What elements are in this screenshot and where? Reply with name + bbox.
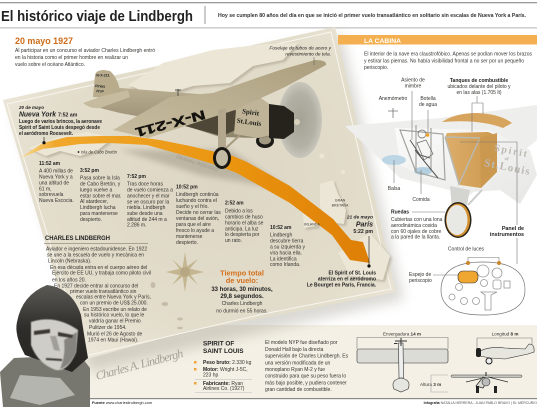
timeline: 10:52 am: como Irlanda. bbox=[270, 262, 300, 268]
label: raft: Balsa bbox=[388, 186, 400, 192]
fin markings: NYP bbox=[96, 89, 105, 94]
far wheel bbox=[256, 134, 274, 148]
ghost fuselage lettering bbox=[483, 141, 534, 178]
timeline: 10:52 pm: Decide no cerrar las bbox=[176, 210, 221, 216]
label: periscope mirror: Espejo de bbox=[409, 272, 431, 278]
arrival text bbox=[307, 270, 377, 288]
map label: Great Britain: GRAN bbox=[335, 198, 346, 202]
propeller disc bbox=[278, 82, 322, 158]
text: model description bbox=[265, 340, 349, 393]
timeline: 10:52 pm: sueño y el frío. bbox=[176, 204, 209, 210]
ghost fuselage lettering: St.Louis bbox=[483, 157, 531, 178]
timeline: 2:52 am: cambios de huso bbox=[225, 214, 263, 220]
biography: Charles Lindbergh: Aviador e ingeniero estadounidense. En 1922 bbox=[46, 247, 147, 253]
timeline: 2:52 am: Debido a los bbox=[225, 209, 253, 215]
timeline: 3:52 pm: luego vuelve a bbox=[80, 187, 112, 193]
panel: spirit of saint louis specs: SPIRIT OF bbox=[203, 340, 234, 348]
label: wheels: con 60 ojales de cobre bbox=[391, 229, 442, 235]
antenna bbox=[175, 89, 181, 96]
intro text: en la historia como el primer hombre en realizar un bbox=[15, 55, 128, 61]
timeline: 10:52 pm: para que el aire bbox=[176, 222, 211, 228]
panel: map paper bbox=[3, 27, 404, 372]
panel: spirit of saint louis specs: SAINT LOUIS bbox=[203, 348, 244, 355]
label: fuselage: revestimiento de tela. bbox=[285, 52, 331, 58]
biography: Charles Lindbergh: valdría ganar el Premio bbox=[89, 319, 141, 325]
diagram: front view: Altura 3 m bbox=[420, 382, 441, 387]
label: periscope mirror: periscopio bbox=[409, 278, 432, 284]
biography: Charles Lindbergh: primer vuelo transatlántico sin bbox=[70, 289, 137, 295]
timeline: 10:52 am: vira hacia ella. bbox=[270, 250, 302, 256]
gear strut bbox=[450, 186, 470, 210]
timeline: 10:52 pm: 10:52 pm bbox=[176, 184, 198, 190]
arrival text: aterriza en el aeródromo bbox=[318, 276, 376, 282]
timeline: 2:52 am: 2:52 am bbox=[225, 200, 244, 206]
fuselage lettering: Spirit bbox=[242, 107, 260, 118]
cabin intro bbox=[364, 52, 532, 71]
tailplane bbox=[83, 90, 130, 108]
credit: Infografía NATALIA HERRERA - JUAN PABLO BRAVO | EL MERCURIO bbox=[424, 401, 537, 405]
title divider bbox=[204, 6, 206, 24]
timeline: 10:52 am: La identifica bbox=[270, 256, 297, 262]
fin markings: RYAN bbox=[95, 84, 105, 89]
timeline: 3:52 pm: estar sobre el mar. bbox=[80, 193, 121, 199]
stop: New York bbox=[18, 105, 102, 137]
timeline: 10:52 pm: ventanas del avión, bbox=[176, 216, 219, 222]
timeline: 3:52 pm: de Cabo Bretón, y bbox=[80, 182, 121, 188]
map label: Great Britain bbox=[332, 198, 349, 208]
diagram: side view bbox=[476, 332, 534, 364]
footer rule bbox=[90, 398, 537, 399]
intro text bbox=[15, 48, 155, 68]
biography: Charles Lindbergh: escalas entre Nueva York y París, bbox=[76, 295, 151, 301]
timeline: 2:52 am bbox=[225, 200, 264, 244]
label: instrument panel bbox=[460, 142, 524, 264]
panel: technical strip background bbox=[80, 325, 537, 398]
timeline: 2:52 am: anticipa. La luz bbox=[225, 226, 259, 232]
label: fuel tanks: en las alas (1.705 lt) bbox=[456, 90, 502, 96]
label: water bottle bbox=[419, 96, 437, 132]
intro text: vuelo sobre el océano Atlántico. bbox=[15, 62, 85, 68]
tail fin bbox=[93, 70, 120, 98]
biography: Charles Lindbergh: En 1953 escribe un relato de bbox=[83, 307, 147, 313]
timeline: 10:52 am: a su izquierda y bbox=[270, 245, 306, 251]
label: light control bbox=[448, 246, 499, 261]
biography: Charles Lindbergh: 1974 en Maui (Hawai). bbox=[88, 338, 138, 344]
timeline: 7:52 pm: se ve oscuro por la bbox=[127, 199, 169, 205]
biography: Charles Lindbergh: se une a la escuela de vuelo y mecánica en bbox=[47, 253, 144, 259]
map label: Great Britain: BRETAÑA bbox=[332, 202, 349, 208]
text: model description: construido para que su peso fuera lo bbox=[265, 374, 346, 380]
timeline: 11:52 am: A 400 millas de bbox=[39, 168, 73, 174]
label: instrument panel: instrumentos bbox=[490, 232, 524, 238]
text: model description: monoplano Ryan M-2 y fue bbox=[265, 367, 325, 373]
islands bbox=[150, 282, 183, 329]
callout: total flight time: de vuelo: bbox=[226, 276, 258, 285]
diagram: front view bbox=[420, 372, 522, 393]
pin: Paris bbox=[367, 236, 371, 268]
upper wing fuel tank bbox=[442, 113, 512, 128]
timeline: 11:52 am: sobrevuela bbox=[39, 192, 64, 198]
subtitle: Hoy se cumplen 80 años del día en que se inició el primer vuelo transatlántico en solitario sin escalas de Nueva York a París. bbox=[218, 13, 527, 19]
timeline: 2:52 am: horario el alba se bbox=[225, 220, 264, 226]
fuselage lettering: St.Louis bbox=[236, 117, 262, 128]
pale wing behind bbox=[345, 105, 537, 195]
timeline: 7:52 pm: 7:52 pm bbox=[127, 174, 146, 180]
panel: cabin header: LA CABINA bbox=[364, 38, 401, 45]
panel: spirit of saint louis specs: Peso bruto: 2.330 kg bbox=[203, 360, 252, 366]
stop: Paris: París bbox=[356, 222, 373, 228]
tank frame bbox=[445, 137, 480, 184]
label: wheels: a la pared de la llanta. bbox=[391, 234, 440, 240]
text: model description: supervisión de Charles Lindbergh. Es bbox=[265, 354, 349, 360]
stop: New York: 20 de mayo bbox=[18, 105, 44, 110]
timeline: 2:52 am: un rato. bbox=[225, 238, 242, 244]
text: model description: una versión modificada de un bbox=[265, 360, 331, 366]
label: anemometer: Anemómetro bbox=[379, 96, 408, 102]
biography: Charles Lindbergh: Lincoln (Nebraska). bbox=[48, 258, 91, 264]
timeline: 10:52 am bbox=[270, 225, 306, 268]
nose bbox=[234, 96, 276, 138]
fin markings: N-X-211 bbox=[96, 74, 110, 78]
wing registration: N-X-211 bbox=[134, 107, 207, 140]
timeline: 11:52 am: Nueva York y a bbox=[39, 174, 73, 180]
label: fuel tanks: ubicados delante del piloto y bbox=[447, 84, 511, 90]
biography: Charles Lindbergh: con un premio de US$ 25.000. bbox=[80, 301, 148, 307]
timeline: 3:52 pm: Al atardecer, bbox=[80, 199, 108, 205]
diagram: side view: Longitud 8 m bbox=[492, 332, 518, 336]
top rule bbox=[0, 2, 537, 3]
source: Fuente www.charleslindbergh.com bbox=[92, 400, 152, 405]
timeline: 7:52 pm: altitud de 244 m a bbox=[127, 217, 167, 223]
panel: cabin header bbox=[338, 35, 537, 45]
label: food bbox=[412, 170, 430, 203]
timeline: 3:52 pm: para mantenerse bbox=[80, 211, 118, 217]
label: fuselage bbox=[269, 46, 332, 65]
stop: Paris: 21 de mayo bbox=[346, 214, 373, 220]
pin: New York bbox=[42, 137, 46, 144]
timeline: 7:52 pm: anochecer y el mar bbox=[127, 193, 170, 199]
illustration: Spirit of St. Louis airplane bbox=[83, 60, 326, 169]
callout: total flight time: 29,8 segundos. bbox=[220, 294, 264, 300]
intro text: Al participar en un concurso el aviador Charles Lindbergh entró bbox=[15, 48, 155, 54]
callout: total flight time: 33 horas, 30 minutos, bbox=[211, 287, 273, 293]
label: wicker seat: Asiento de bbox=[401, 78, 425, 84]
signature: Charles A. Lindbergh bbox=[94, 346, 185, 383]
periscope mirror bbox=[458, 271, 478, 283]
callout: total flight time bbox=[211, 268, 273, 314]
biography: Charles Lindbergh: en los años 20. bbox=[52, 277, 86, 283]
label: wheels: aerodinámica cosida bbox=[391, 223, 437, 229]
cabin intro: y estirar las piernas. No había visibilidad frontal a no ser por un pequeño bbox=[364, 58, 524, 64]
timeline: 3:52 pm bbox=[80, 168, 121, 223]
timeline: 10:52 pm: despierto. bbox=[176, 240, 198, 246]
food bbox=[414, 167, 432, 175]
biography: Charles Lindbergh bbox=[44, 235, 151, 344]
text: model description: más bajo posible, y pudiera contener bbox=[265, 380, 347, 386]
biography: Charles Lindbergh: En 1927 decide entrar al concurso del bbox=[54, 283, 138, 289]
timeline: 10:52 am: 10:52 am bbox=[270, 225, 292, 231]
timeline: 10:52 pm: Lindbergh continúa bbox=[176, 192, 219, 198]
timeline: 7:52 pm: sube desde una bbox=[127, 211, 163, 217]
timeline: 7:52 pm: 2.286 m. bbox=[127, 223, 146, 229]
callout: total flight time: Tiempo total bbox=[220, 268, 264, 278]
diagram: instrument panel bbox=[441, 261, 525, 315]
label: wheels: Ruedas bbox=[391, 210, 409, 216]
timeline: 7:52 pm: Tras doce horas bbox=[127, 181, 163, 187]
timeline: 3:52 pm: despierto. bbox=[80, 217, 102, 223]
text: model description: El modelo NYP fue diseñado por bbox=[265, 340, 338, 346]
biography: Charles Lindbergh: Ejército de EE UU, y trabaja como piloto civil bbox=[52, 271, 151, 277]
timeline: 10:52 pm: fresco lo ayude a bbox=[176, 228, 214, 234]
callout: total flight time: Charles Lindbergh bbox=[222, 301, 263, 307]
timeline: 11:52 am: una altitud de bbox=[39, 180, 69, 186]
map label: Ireland: IRLANDA bbox=[304, 222, 320, 226]
ghost fuselage lettering: of bbox=[504, 157, 509, 163]
timeline: 10:52 pm: mantenerse bbox=[176, 234, 203, 240]
timeline: 10:52 am: descubre tierra bbox=[270, 239, 304, 245]
engine hub bbox=[294, 119, 300, 125]
compass rose bbox=[166, 252, 204, 292]
flight path arrow bbox=[20, 136, 370, 263]
fuselage fuel tank bbox=[445, 132, 497, 188]
raft bbox=[382, 155, 406, 165]
diagram: top view bbox=[357, 332, 448, 392]
label: wheels: Cubiertas con una lona bbox=[391, 217, 443, 223]
fuselage bbox=[100, 88, 276, 138]
timeline: 3:52 pm: Pasa sobre la Isla bbox=[80, 176, 120, 182]
timeline: 7:52 pm: de vuelo comienza a bbox=[127, 187, 173, 193]
label: fuselage: Fuselaje de tubos de acero y bbox=[269, 46, 332, 52]
stop: New York: 7:52 am bbox=[58, 112, 78, 118]
stop: New York: Spirit of Saint Louis despegó desde bbox=[19, 125, 100, 131]
timeline: 11:52 am: 11:52 am bbox=[39, 161, 61, 167]
label: water bottle: Botella bbox=[420, 96, 436, 102]
illustration: cabin cutaway bbox=[345, 105, 537, 238]
label: wicker seat: mimbre bbox=[405, 84, 422, 90]
water bottle bbox=[426, 133, 429, 137]
diagram: top view: Envergadura 14 m bbox=[383, 332, 421, 336]
biography: Charles Lindbergh: Murió el 26 de Agosto de bbox=[87, 332, 143, 338]
ghost fuselage lettering: Spirit bbox=[493, 143, 528, 160]
panel: spirit of saint louis specs: 223 hp bbox=[203, 372, 219, 378]
stop: New York: el aeródromo Roosevelt. bbox=[19, 131, 74, 137]
wing bbox=[113, 60, 326, 138]
white fuselage bbox=[395, 128, 537, 204]
stop: Paris bbox=[346, 214, 373, 235]
timeline: 7:52 pm bbox=[127, 174, 173, 229]
engine bbox=[269, 104, 294, 139]
header rule bbox=[0, 27, 537, 29]
timeline: 10:52 pm bbox=[176, 184, 221, 246]
timeline: 10:52 am: Lindbergh bbox=[270, 233, 292, 239]
near wheel bbox=[213, 147, 231, 169]
label: water bottle: de agua bbox=[419, 102, 437, 108]
portrait: Charles Lindbergh bbox=[0, 285, 90, 407]
plane shadow on map bbox=[120, 150, 290, 190]
text: model description: gran cantidad de combustible. bbox=[265, 387, 332, 393]
shadow beneath wing bbox=[170, 108, 240, 136]
timeline: 3:52 pm: Lindbergh lucha bbox=[80, 205, 116, 211]
stop: Paris: 5:22 pm bbox=[353, 229, 373, 235]
title: El histórico viaje de Lindbergh bbox=[1, 9, 193, 25]
map land masses bbox=[28, 43, 392, 282]
label: wicker seat bbox=[401, 78, 425, 140]
label: periscope mirror bbox=[409, 272, 458, 284]
label: light control: Control de luces bbox=[448, 246, 485, 252]
label: raft bbox=[388, 160, 400, 192]
arrival text: El Spirit of St. Louis bbox=[328, 270, 376, 276]
cabin intro: El interior de la nave era claustrofóbico. Apenas se podían mover los brazos bbox=[364, 52, 532, 58]
panel: spirit of saint louis specs: Airlines Co. (1927) bbox=[203, 386, 245, 392]
map label: ocean: Océano Atlántico bbox=[175, 154, 220, 174]
panel: spirit of saint louis specs: Fabricante: Ryan bbox=[203, 381, 243, 387]
biography: Charles Lindbergh: su histórico vuelo, lo que le bbox=[84, 313, 145, 319]
fin markings bbox=[95, 74, 110, 94]
biography: Charles Lindbergh: Pulitzer de 1954. bbox=[89, 325, 127, 331]
timeline: 10:52 pm: luchando contra el bbox=[176, 198, 217, 204]
cabin intro: periscopio. bbox=[364, 65, 388, 71]
label: food: Comida bbox=[412, 197, 430, 203]
stop: New York: Nueva York bbox=[19, 112, 57, 118]
wheel bbox=[444, 202, 472, 238]
biography: Charles Lindbergh: En esa década entra en el cuerpo aéreo del bbox=[50, 265, 147, 271]
timeline: 11:52 am: Nueva Escocia. bbox=[39, 198, 74, 204]
light controls bbox=[466, 261, 470, 265]
panel: spirit of saint louis specs bbox=[194, 340, 252, 392]
fuselage lettering bbox=[236, 107, 263, 128]
label: anemometer bbox=[379, 96, 408, 118]
label: fuel tanks bbox=[447, 78, 511, 132]
timeline: 7:52 pm: niebla. Lindbergh bbox=[127, 205, 166, 211]
label: instrument panel: Panel de bbox=[502, 226, 524, 232]
timeline: 11:52 am: 61 m, bbox=[39, 186, 52, 192]
frame and pilot bbox=[400, 125, 445, 180]
text: model description: Donald Hall bajo la directa bbox=[265, 347, 324, 353]
timeline: 3:52 pm: 3:52 pm bbox=[80, 168, 99, 174]
stop: New York: Luego de varios brincos, la aeronave bbox=[19, 119, 102, 125]
callout: total flight time: no durmió en 55 horas. bbox=[216, 308, 268, 314]
panel: spirit of saint louis specs: Motor: Wright J-5C, bbox=[203, 367, 248, 373]
label: Cape Breton: Isla de Cabo Bretón bbox=[81, 150, 118, 154]
timeline: 2:52 am: lo despierta por bbox=[225, 232, 260, 238]
landing gear bbox=[218, 108, 226, 150]
arrival text: Le Bourget en París, Francia. bbox=[307, 282, 377, 288]
label: fuel tanks: Tanques de combustible bbox=[450, 78, 508, 84]
timeline: 11:52 am bbox=[39, 161, 74, 204]
label: wheels bbox=[391, 210, 445, 240]
biography: Charles Lindbergh: CHARLES LINDBERGH bbox=[45, 235, 110, 242]
heading: date: 20 mayo 1927 bbox=[15, 35, 73, 46]
